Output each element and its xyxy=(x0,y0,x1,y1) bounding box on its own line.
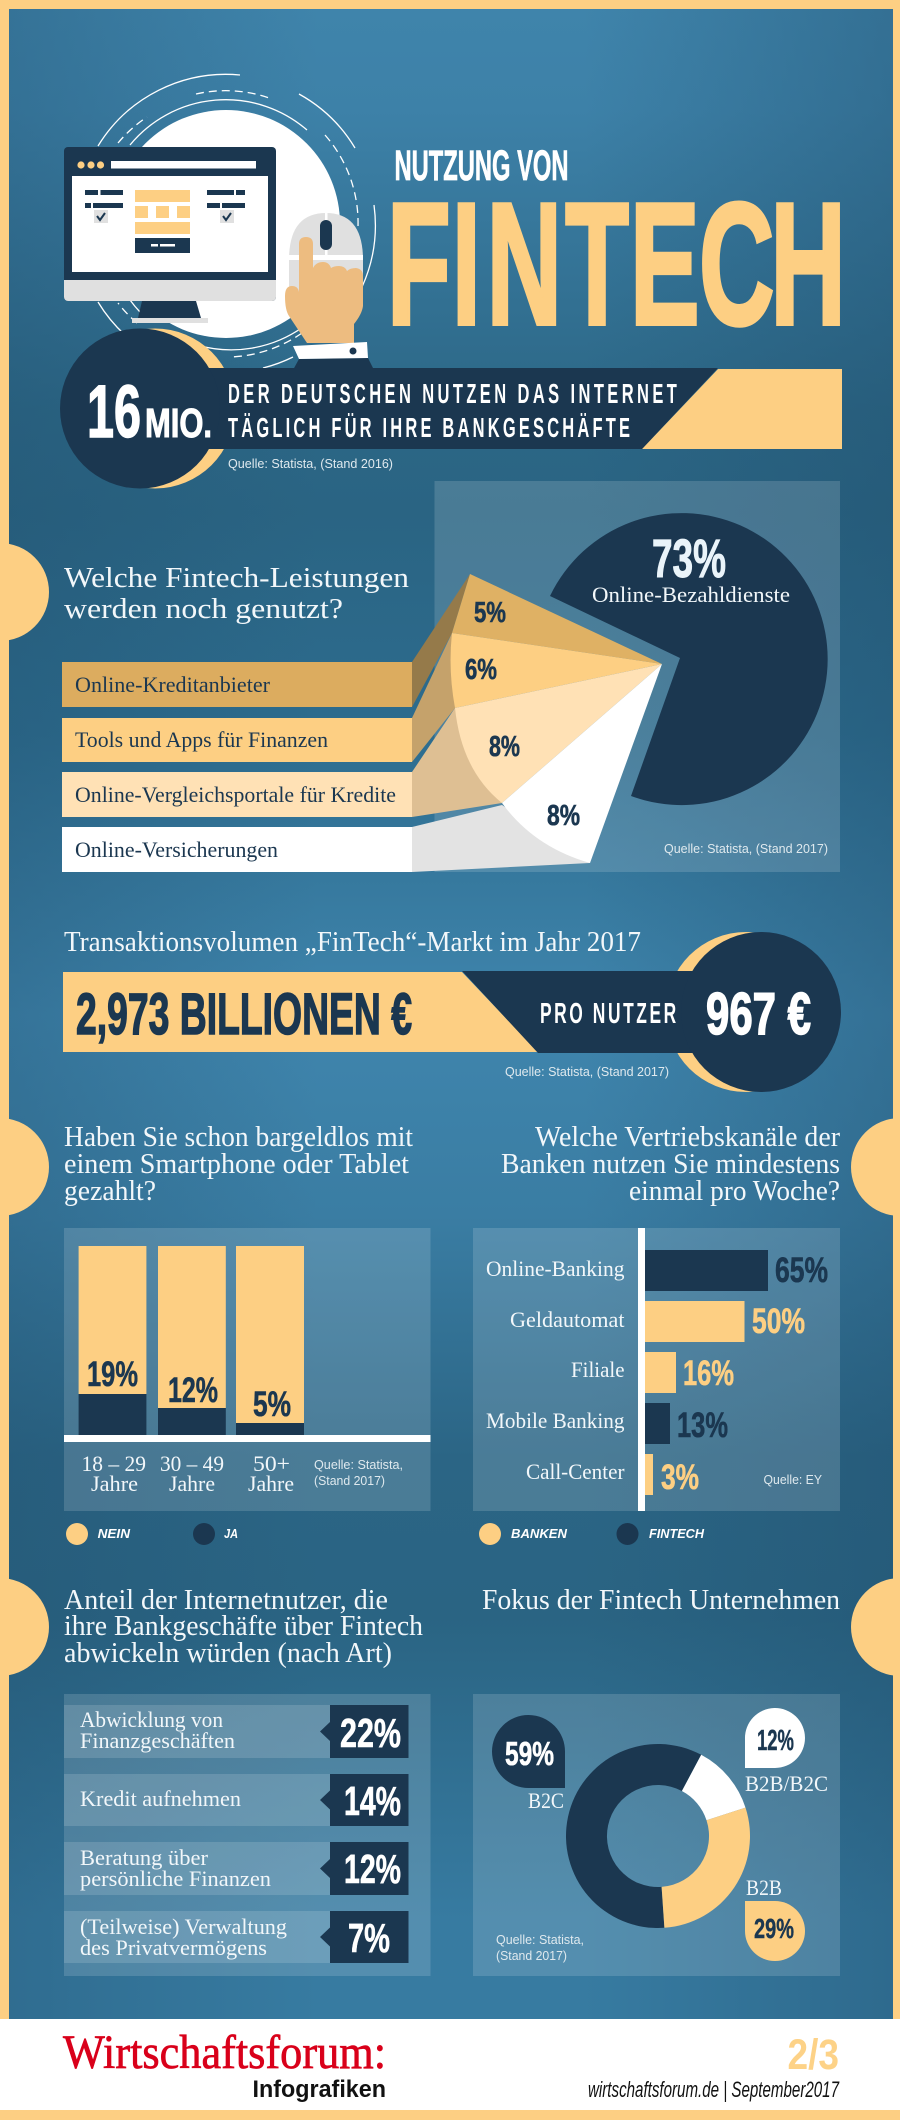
row: Online-Kreditanbieter: Online-Kreditanbieter xyxy=(75,672,271,697)
age labels xyxy=(82,1451,294,1496)
row 22 percent: Abwicklung von xyxy=(80,1707,223,1732)
bubble B2B: B2B xyxy=(746,1875,782,1900)
heading: Anteil der Internetnutzer: abwickeln würden (nach Art) xyxy=(64,1637,392,1669)
logo subtitle: Infografiken xyxy=(252,2076,386,2103)
legend: Banken / Fintech: FINTECH xyxy=(649,1527,705,1541)
row Geldautomat: Geldautomat xyxy=(510,1307,624,1332)
bar 30-49 xyxy=(158,1246,226,1435)
source: (Stand 2017) xyxy=(314,1473,385,1488)
row Online-Banking: 65% xyxy=(775,1251,828,1290)
age labels: Jahre xyxy=(169,1471,215,1496)
heading: Transaktionsvolumen: Transaktionsvolumen „FinTech“-Markt im Jahr 2017 xyxy=(64,926,641,958)
icon: decorative orbit rings xyxy=(98,74,375,368)
source: Quelle: Statista, xyxy=(496,1932,584,1947)
icon: monitor xyxy=(64,147,276,323)
dark ribbon xyxy=(170,368,718,449)
banner text line 2: TÄGLICH FÜR IHRE BANKGESCHÄFTE xyxy=(228,412,630,443)
heading: bargeldlos: gezahlt? xyxy=(64,1175,156,1207)
legend: Banken / Fintech: BANKEN xyxy=(511,1527,568,1541)
yellow ribbon end xyxy=(642,369,842,449)
wedge 5 percent xyxy=(452,574,662,664)
age labels: Jahre xyxy=(248,1471,294,1496)
row Online-Banking xyxy=(486,1250,828,1291)
value 8% second: 8% xyxy=(547,800,580,832)
bubble B2C: 59% xyxy=(505,1735,554,1772)
row Call-Center: 3% xyxy=(661,1458,699,1497)
source xyxy=(314,1457,403,1488)
row: Versicherungen xyxy=(62,827,412,872)
axis xyxy=(64,1435,430,1442)
row Mobile Banking: 13% xyxy=(677,1406,728,1445)
bar 50+: 5% xyxy=(253,1385,291,1424)
page number: 2/3 xyxy=(788,2031,839,2079)
heading: Vertriebskanäle: Banken nutzen Sie mindestens xyxy=(501,1148,840,1180)
connector sides xyxy=(412,574,470,707)
row 22 percent: 22% xyxy=(340,1710,401,1756)
wedge 8 percent white xyxy=(502,664,662,863)
bubble B2B/B2C xyxy=(745,1708,828,1796)
row: Vergleichsportale xyxy=(62,772,412,817)
legend: Banken / Fintech xyxy=(479,1523,705,1545)
panel: pie chart background xyxy=(434,481,840,872)
row: Online-Kreditanbieter xyxy=(62,662,412,707)
row 12 percent xyxy=(64,1842,408,1895)
row 22 percent xyxy=(64,1705,408,1758)
pie: 73 percent xyxy=(550,513,828,805)
row 7 percent: des Privatvermögens xyxy=(80,1935,267,1960)
icon: sleeve and cuff xyxy=(293,342,374,370)
wedge 8 percent xyxy=(455,664,662,803)
row Online-Banking: Online-Banking xyxy=(486,1256,624,1281)
heading: bargeldlos xyxy=(64,1121,413,1207)
age labels: 50+ xyxy=(253,1451,290,1476)
heading: Anteil der Internetnutzer: Anteil der Internetnutzer, die xyxy=(64,1584,388,1616)
source: (Stand 2017) xyxy=(496,1948,567,1963)
row: Vergleichsportale: Online-Vergleichsportale für Kredite xyxy=(75,782,396,807)
panel: channel bar chart xyxy=(473,1228,840,1511)
heading line 2: werden noch genutzt? xyxy=(64,593,343,625)
legend: Nein / Ja: NEIN xyxy=(98,1527,131,1541)
bar 30-49: 12% xyxy=(168,1371,218,1410)
age labels: 18 – 29 xyxy=(82,1451,146,1476)
row Call-Center: Call-Center xyxy=(526,1459,625,1484)
value: 2,973 BILLIONEN € xyxy=(76,982,412,1047)
bubble B2C xyxy=(492,1715,565,1813)
heading: Vertriebskanäle: einmal pro Woche? xyxy=(629,1175,840,1207)
yellow crescent xyxy=(666,932,826,1092)
source: Quelle: Statista, (Stand 2017) xyxy=(505,1064,669,1079)
panel: ranking list xyxy=(64,1694,430,1976)
value 6%: 6% xyxy=(465,654,497,686)
value 8%: 8% xyxy=(489,731,520,763)
age labels: 30 – 49 xyxy=(160,1451,224,1476)
source: Quelle: EY xyxy=(764,1472,822,1487)
bubble B2C: B2C xyxy=(528,1788,564,1813)
row 7 percent: 7% xyxy=(348,1915,390,1961)
value per user: 967 € xyxy=(706,981,811,1047)
heading: bargeldlos: einem Smartphone oder Tablet xyxy=(64,1148,409,1180)
source xyxy=(496,1932,584,1963)
row Mobile Banking: Mobile Banking xyxy=(486,1408,624,1433)
panel: donut chart xyxy=(473,1694,840,1976)
figure 16: 16 xyxy=(87,370,141,453)
wedge 6 percent xyxy=(451,633,662,708)
logo: Wirtschaftsforum: xyxy=(63,2026,386,2079)
footer xyxy=(0,2019,900,2110)
bar 50+ xyxy=(236,1246,304,1435)
bubble B2B xyxy=(745,1875,805,1961)
donut xyxy=(566,1744,750,1928)
row 12 percent: Beratung über xyxy=(80,1845,209,1870)
row 14 percent xyxy=(64,1774,408,1826)
semicircle tabs xyxy=(0,543,900,1676)
legend: Nein / Ja xyxy=(66,1523,238,1545)
row Filiale xyxy=(571,1352,734,1393)
row: Tools und Apps xyxy=(62,718,412,762)
heading: Vertriebskanäle: Welche Vertriebskanäle der xyxy=(535,1121,840,1153)
dark circle xyxy=(60,328,220,488)
row Filiale: Filiale xyxy=(571,1357,624,1382)
icon: pointing hand xyxy=(285,237,363,343)
heading: Anteil der Internetnutzer: ihre Bankgeschäfte über Fintech xyxy=(64,1610,423,1642)
heading: Anteil der Internetnutzer xyxy=(64,1584,423,1669)
heading: bargeldlos: Haben Sie schon bargeldlos mit xyxy=(64,1121,413,1153)
row 12 percent: 12% xyxy=(344,1846,401,1892)
value 5%: 5% xyxy=(474,597,506,629)
label per user: PRO NUTZER xyxy=(540,998,676,1030)
row 7 percent xyxy=(64,1911,408,1963)
icon: mouse xyxy=(289,213,363,320)
age labels: Jahre xyxy=(91,1471,138,1496)
row 14 percent: Kredit aufnehmen xyxy=(80,1786,241,1811)
row Call-Center xyxy=(526,1454,699,1497)
bar 18-29: 19% xyxy=(87,1355,138,1394)
source: Quelle: Statista, (Stand 2017) xyxy=(664,841,828,856)
icon: white disc xyxy=(112,110,340,338)
row: Tools und Apps: Tools und Apps für Finanzen xyxy=(75,727,328,752)
source: Quelle: Statista, (Stand 2016) xyxy=(228,456,393,471)
label 73%: 73% xyxy=(652,529,726,589)
heading: Vertriebskanäle xyxy=(501,1121,840,1207)
heading: Fokus: Fokus der Fintech Unternehmen xyxy=(482,1584,840,1616)
yellow crescent xyxy=(75,328,235,488)
axis xyxy=(638,1228,645,1511)
yellow ribbon xyxy=(63,972,538,1052)
exploded pie chart xyxy=(412,513,828,872)
row 7 percent: (Teilweise) Verwaltung xyxy=(80,1914,287,1939)
unit Mio.: MIO. xyxy=(145,400,212,446)
bar 18-29 xyxy=(79,1246,146,1435)
row 22 percent: Finanzgeschäften xyxy=(80,1728,235,1753)
row 14 percent: 14% xyxy=(344,1778,401,1824)
row Geldautomat xyxy=(510,1301,805,1342)
legend: Nein / Ja: JA xyxy=(224,1527,238,1541)
dark ribbon xyxy=(462,971,700,1053)
row Geldautomat: 50% xyxy=(752,1302,805,1341)
row 12 percent: persönliche Finanzen xyxy=(80,1866,271,1891)
dark circle xyxy=(681,932,841,1092)
bubble B2B/B2C: B2B/B2C xyxy=(745,1771,828,1796)
row Filiale: 16% xyxy=(683,1354,734,1393)
row Mobile Banking xyxy=(486,1403,728,1445)
banner text: DER DEUTSCHEN NUTZEN DAS INTERNET xyxy=(228,378,677,409)
bubble B2B: 29% xyxy=(754,1913,794,1944)
row: Versicherungen: Online-Versicherungen xyxy=(75,837,278,862)
banner: 16 Mio. xyxy=(60,328,842,488)
bubble B2B/B2C: 12% xyxy=(757,1725,794,1757)
title: Fintech: FINTECH xyxy=(387,168,846,362)
banner: transaction volume xyxy=(63,932,841,1092)
title: Nutzung von: NUTZUNG VON xyxy=(394,142,568,190)
panel: stacked bar chart xyxy=(64,1228,430,1511)
heading: Fintech-Leistungen: Welche Fintech-Leistungen xyxy=(64,562,410,594)
label Online-Bezahldienste: Online-Bezahldienste xyxy=(592,582,790,607)
source: Quelle: Statista, xyxy=(314,1457,403,1472)
hero illustration: computer and mouse xyxy=(64,74,375,370)
